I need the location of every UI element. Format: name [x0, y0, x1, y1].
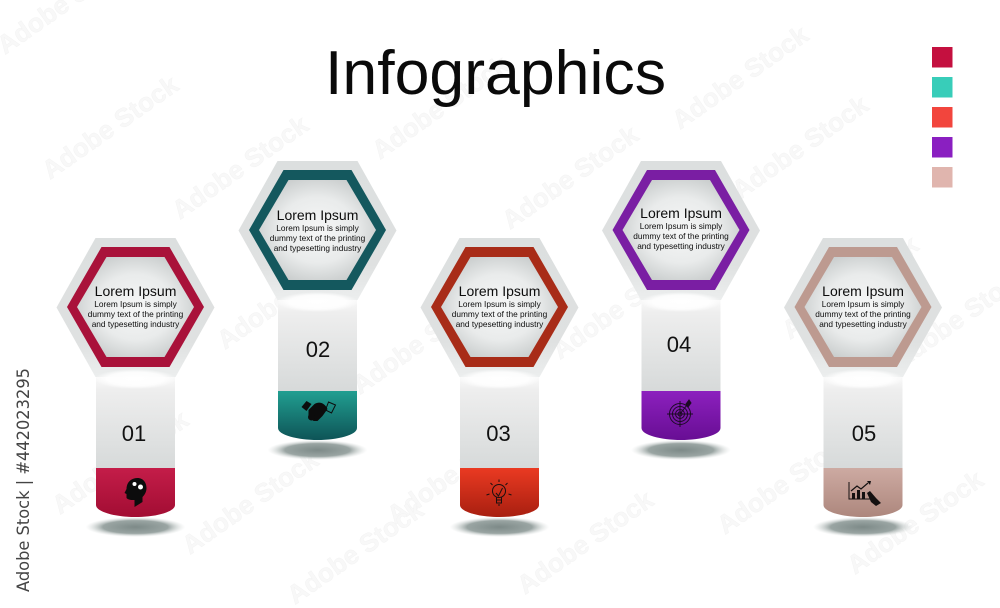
- stock watermark pattern: Adobe Stock: [211, 239, 359, 355]
- stock watermark pattern: Adobe Stock: [496, 119, 644, 235]
- icon: bar chart with hand: [849, 481, 881, 506]
- stock watermark pattern: Adobe Stock: [281, 494, 429, 608]
- shadow: [86, 517, 186, 537]
- text block: Lorem Ipsum is simply: [822, 299, 905, 309]
- icon: head with gears: [124, 478, 146, 507]
- stock watermark pattern: Adobe Stock: [366, 49, 514, 165]
- text block: [270, 207, 366, 253]
- icon: light bulb: [486, 480, 512, 505]
- stock watermark pattern: Adobe Stock: [46, 404, 194, 520]
- stock watermark pattern: Adobe Stock: [381, 414, 529, 530]
- text block: dummy text of the printing: [633, 231, 729, 241]
- number: 04: [667, 332, 691, 357]
- text block: Lorem Ipsum is simply: [276, 223, 360, 233]
- text block: Lorem Ipsum is simply: [640, 221, 723, 231]
- text block: and typesetting industry: [456, 319, 544, 329]
- text block: [633, 205, 729, 251]
- hexagon glow: [94, 369, 176, 389]
- text block: [815, 283, 911, 329]
- hexagon inner: [259, 180, 376, 280]
- column: [642, 293, 720, 393]
- stock watermark pattern: Adobe Stock: [166, 109, 314, 225]
- text block: [452, 283, 548, 329]
- hexagon outer: [56, 238, 214, 377]
- hexagon ring: [249, 170, 386, 290]
- shadow: [631, 440, 731, 460]
- hexagon outer: [420, 238, 578, 377]
- coloured base: [278, 391, 357, 440]
- hexagon outer: [602, 161, 760, 300]
- column: [278, 293, 357, 393]
- text block: Lorem Ipsum is simply: [94, 299, 178, 309]
- shadow: [268, 440, 368, 460]
- hexagon outer: [238, 161, 396, 300]
- stock watermark pattern: Adobe Stock: [36, 69, 184, 185]
- hexagon outer: [784, 238, 942, 377]
- hexagon glow: [458, 369, 540, 389]
- coloured base: [642, 391, 720, 440]
- text block: and typesetting industry: [819, 319, 908, 329]
- hexagon inner: [804, 257, 922, 357]
- text block: Lorem Ipsum: [95, 283, 176, 299]
- icon: target with dart: [667, 400, 693, 427]
- text block: dummy text of the printing: [88, 309, 184, 319]
- hexagon glow: [276, 292, 358, 312]
- title: Infographics: [325, 38, 666, 108]
- stock watermark pattern: Adobe Stock: [546, 249, 694, 365]
- text block: and typesetting industry: [274, 243, 362, 253]
- hexagon glow: [822, 369, 904, 389]
- stock watermark pattern: Adobe Stock: [511, 484, 659, 600]
- text block: and typesetting industry: [637, 241, 726, 251]
- panel: step 05: [784, 238, 942, 537]
- stock watermark pattern: Adobe Stock: [666, 19, 814, 135]
- text block: dummy text of the printing: [815, 309, 911, 319]
- coloured base: [460, 468, 539, 517]
- column: [824, 370, 902, 470]
- icon: handshake: [302, 401, 336, 421]
- text block: dummy text of the printing: [452, 309, 548, 319]
- text block: Lorem Ipsum: [459, 283, 540, 299]
- number: 05: [852, 421, 876, 446]
- panel: step 04: [602, 161, 760, 460]
- hexagon ring: [431, 247, 568, 367]
- hexagon inner: [622, 180, 740, 280]
- text block: Lorem Ipsum: [822, 283, 904, 299]
- column: [460, 370, 539, 470]
- vertical stock credit: Adobe Stock | #442023295: [14, 368, 34, 592]
- stock watermark pattern: Adobe Stock: [841, 464, 989, 580]
- shadow: [813, 517, 913, 537]
- number: 03: [486, 421, 511, 446]
- stock watermark pattern: Adobe Stock: [711, 424, 859, 540]
- stock watermark pattern: Adobe Stock: [776, 229, 924, 345]
- text block: Lorem Ipsum: [640, 205, 722, 221]
- number: 01: [122, 421, 146, 446]
- text block: Lorem Ipsum: [277, 207, 358, 223]
- hexagon inner: [441, 257, 558, 357]
- hexagon ring: [612, 170, 750, 290]
- hexagon glow: [640, 292, 722, 312]
- coloured base: [96, 468, 175, 517]
- colour swatches legend: [932, 47, 952, 188]
- text block: [88, 283, 184, 329]
- panel: step 03: [420, 238, 578, 537]
- panel: step 02: [238, 161, 396, 460]
- coloured base: [824, 468, 902, 517]
- stock watermark pattern: Adobe Stock: [726, 89, 874, 205]
- hexagon ring: [67, 247, 204, 367]
- text block: dummy text of the printing: [270, 233, 366, 243]
- text block: Lorem Ipsum is simply: [458, 299, 542, 309]
- hexagon inner: [77, 257, 194, 357]
- shadow: [450, 517, 550, 537]
- text block: and typesetting industry: [92, 319, 180, 329]
- number: 02: [306, 337, 330, 362]
- panel: step 01: [56, 238, 214, 537]
- hexagon ring: [794, 247, 932, 367]
- stock watermark pattern: Adobe Stock: [346, 284, 494, 400]
- stock watermark pattern: Adobe Stock: [176, 444, 324, 560]
- column: [96, 370, 175, 470]
